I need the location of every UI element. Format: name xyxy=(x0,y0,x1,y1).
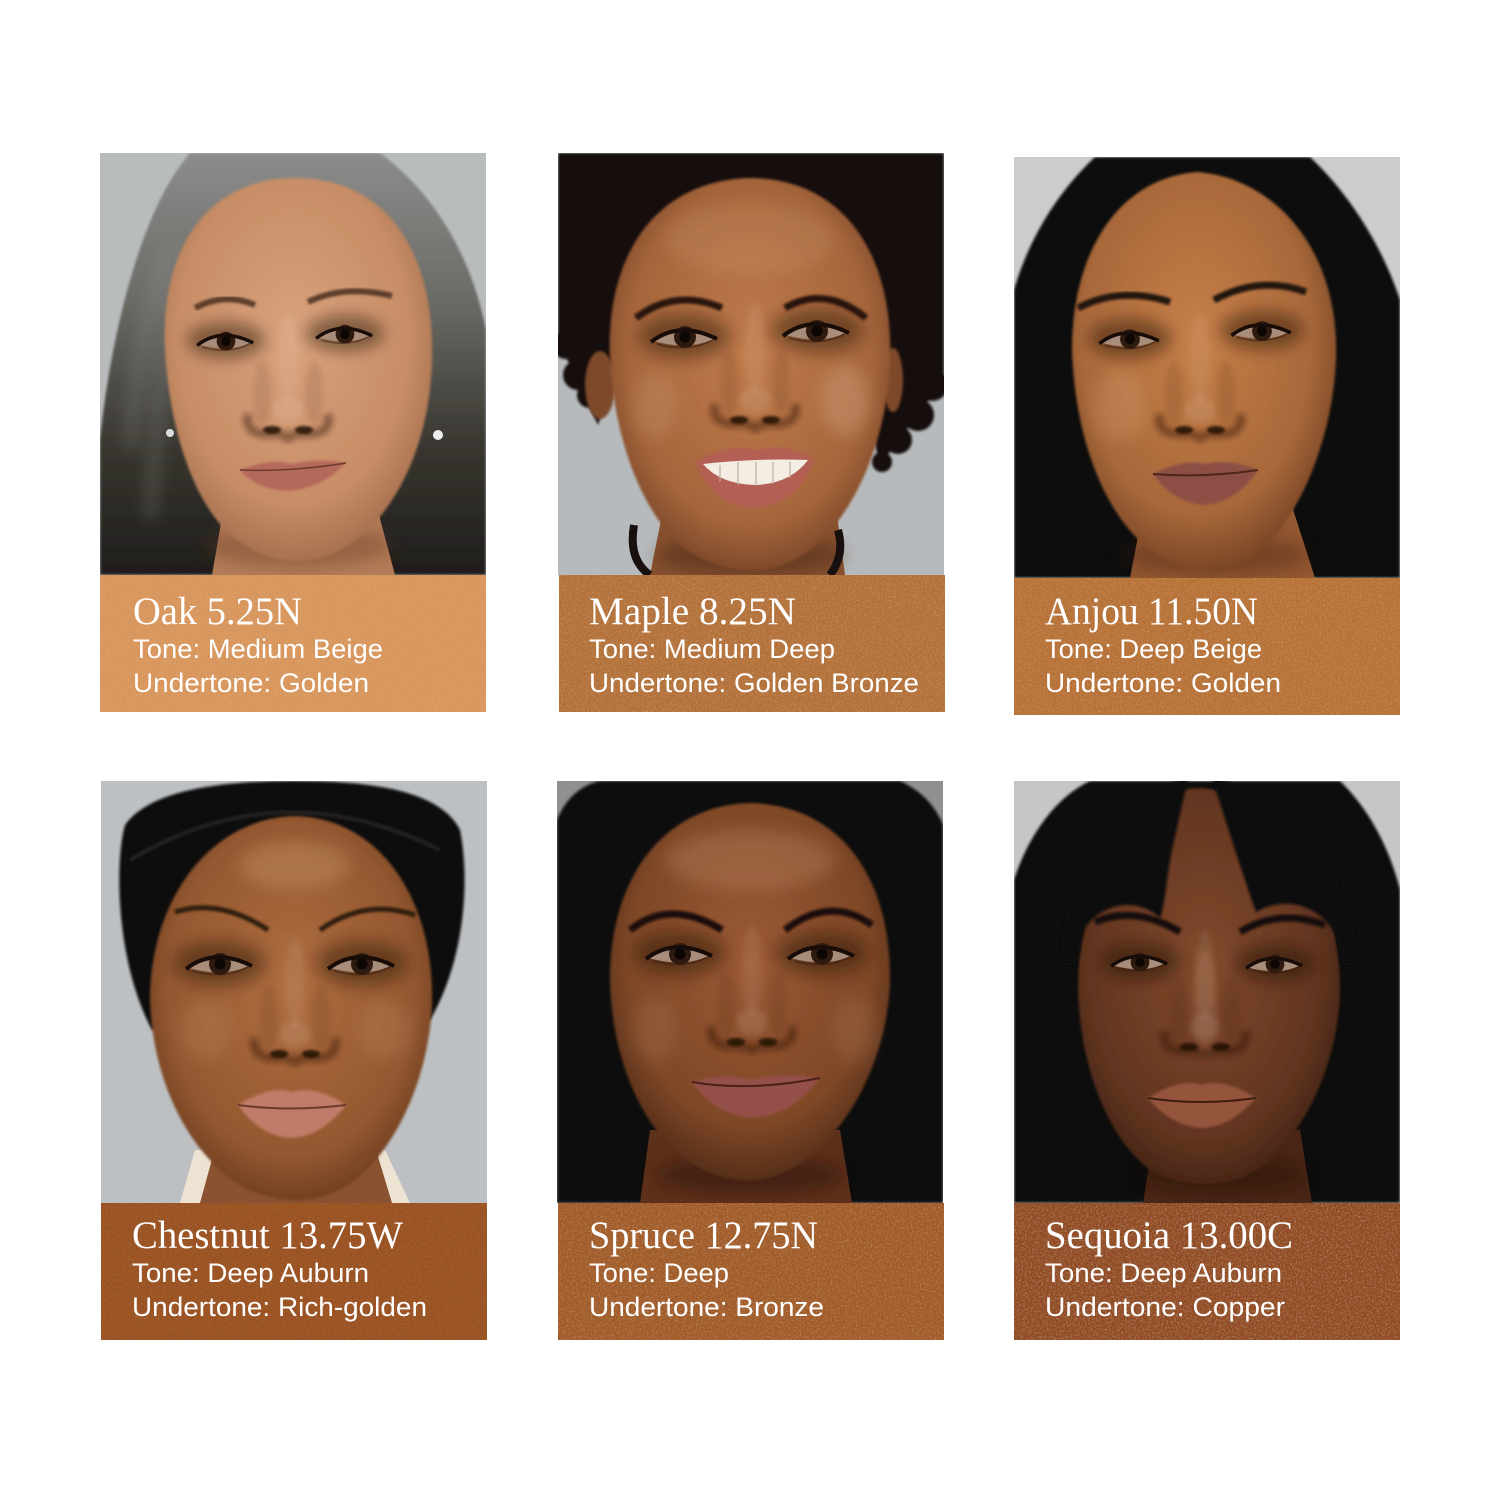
shade label: Maple: Maple 8.25N xyxy=(589,590,796,633)
shade label: Maple: Tone: Medium Deep xyxy=(589,634,835,664)
panel: Chestnut 13.75W xyxy=(101,781,487,1340)
swatch: Spruce xyxy=(558,1203,944,1340)
swatch: Chestnut xyxy=(101,1203,487,1340)
shade label: Maple: Undertone: Golden Bronze xyxy=(589,668,919,698)
shade label: Anjou xyxy=(1045,590,1281,698)
shade label: Oak: Oak 5.25N xyxy=(133,590,302,633)
portrait: Spruce xyxy=(557,781,943,1203)
shade label: Oak xyxy=(133,590,383,698)
shade label: Spruce: Undertone: Bronze xyxy=(589,1292,824,1322)
shade label: Anjou: Undertone: Golden xyxy=(1045,668,1281,698)
right ear xyxy=(883,348,903,412)
panel: Anjou 11.50N xyxy=(1014,157,1400,715)
shade label: Sequoia: Sequoia 13.00C xyxy=(1045,1214,1293,1257)
shade label: Chestnut: Undertone: Rich-golden xyxy=(132,1292,427,1322)
shade label: Oak: Tone: Medium Beige xyxy=(133,634,383,664)
swatch: Oak xyxy=(100,575,486,712)
panel: Sequoia 13.00C xyxy=(1014,778,1400,1340)
portrait: Sequoia xyxy=(1014,778,1400,1203)
curly hair xyxy=(552,153,948,472)
portrait: Maple xyxy=(552,153,948,575)
shade label: Anjou: Anjou 11.50N xyxy=(1045,590,1258,633)
portrait: Anjou xyxy=(1014,157,1400,578)
shade label: Chestnut: Chestnut 13.75W xyxy=(132,1214,403,1257)
shade label: Sequoia: Tone: Deep Auburn xyxy=(1045,1258,1282,1288)
shade label: Maple xyxy=(589,590,919,698)
shade label: Anjou: Tone: Deep Beige xyxy=(1045,634,1262,664)
hair bangs xyxy=(1078,781,1340,958)
shade label: Chestnut xyxy=(132,1214,427,1322)
swatch: Sequoia xyxy=(1014,1203,1400,1340)
shade label: Sequoia xyxy=(1045,1214,1293,1322)
shade label: Spruce: Tone: Deep xyxy=(589,1258,729,1288)
portrait: Chestnut xyxy=(101,781,487,1203)
panel: Spruce 12.75N xyxy=(557,781,944,1340)
shade label: Spruce xyxy=(589,1214,824,1322)
shade label: Chestnut: Tone: Deep Auburn xyxy=(132,1258,369,1288)
shade label: Spruce: Spruce 12.75N xyxy=(589,1214,818,1257)
swatch: Maple xyxy=(559,575,945,712)
panel: Maple 8.25N xyxy=(552,153,948,712)
portrait: Oak xyxy=(100,153,486,575)
shade label: Sequoia: Undertone: Copper xyxy=(1045,1292,1285,1322)
left ear xyxy=(585,351,615,419)
swatch: Anjou xyxy=(1014,578,1400,715)
panel: Oak 5.25N xyxy=(100,153,486,712)
shade label: Oak: Undertone: Golden xyxy=(133,668,369,698)
